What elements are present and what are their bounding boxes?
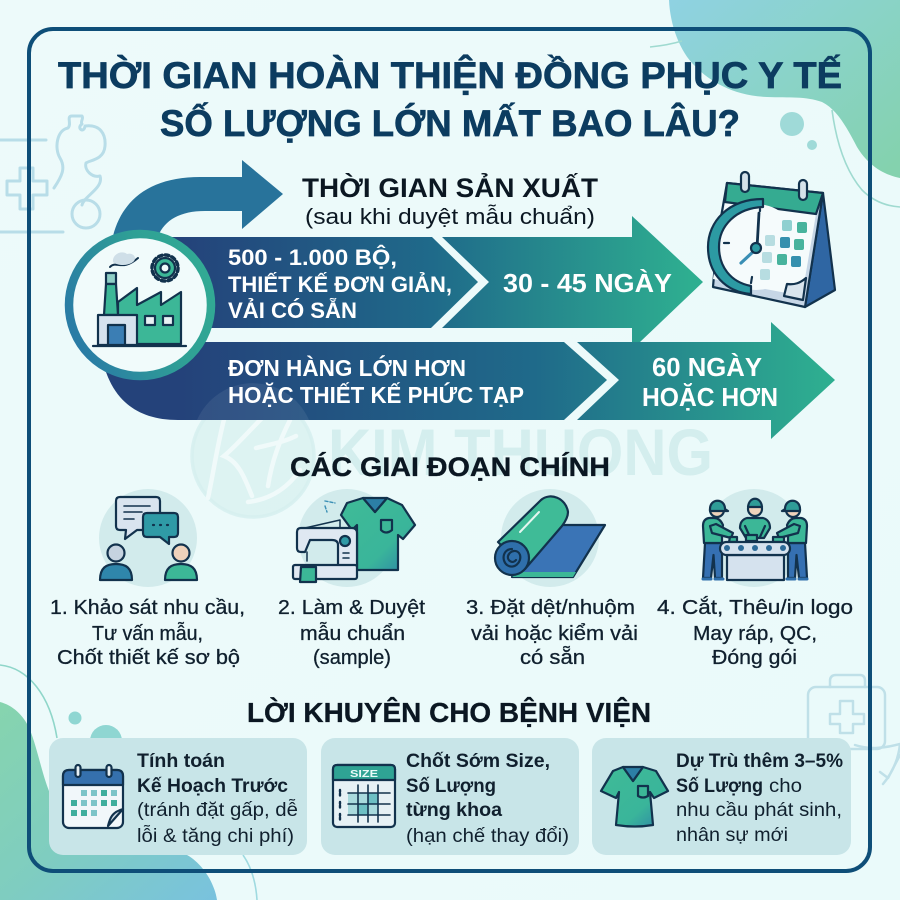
heading: advice for hospitals: LỜI KHUYÊN CHO BỆNH VIỆN <box>247 697 651 728</box>
faint medical bag decoration <box>808 675 900 784</box>
faint watermark over the arrow <box>197 383 309 420</box>
card 1 text: lỗi & tăng chi phí) <box>137 824 294 847</box>
stage 3 text: 3. Đặt dệt/nhuộm <box>466 596 635 619</box>
icon: size chart <box>333 765 395 827</box>
icon: fabric roll <box>495 489 605 587</box>
arrow text: quantity <box>228 245 452 323</box>
icon: workers at conveyor <box>703 489 807 587</box>
arrow text: 30-45 days: 30 - 45 NGÀY <box>503 268 672 298</box>
arrow: 30-45 days track <box>170 216 703 342</box>
card 3 text <box>676 750 843 846</box>
stage 1: survey <box>50 489 245 669</box>
card 1 text <box>137 750 298 847</box>
arrow text: quantity: THIẾT KẾ ĐƠN GIẢN, <box>228 272 452 297</box>
watermark: Kim Thuong logo and name: KIM THUONG <box>328 415 713 489</box>
card 1: plan ahead <box>49 738 307 855</box>
heading: production time <box>302 171 599 229</box>
card 1 text: Kế Hoạch Trước <box>137 775 288 797</box>
card 2 text <box>406 750 569 847</box>
stage 2 text: mẫu chuẩn <box>300 622 405 645</box>
stage 2 text: (sample) <box>313 646 391 669</box>
stage 1 text: 1. Khảo sát nhu cầu, <box>50 596 245 619</box>
stage 3 text: vải hoặc kiểm vải <box>471 622 638 645</box>
card 3 text: Dự Trù thêm 3–5% <box>676 750 843 772</box>
stage 2 text: 2. Làm & Duyệt <box>278 596 425 619</box>
stage 4: cutting and sewing <box>657 489 853 669</box>
arrow text: large orders: HOẶC THIẾT KẾ PHỨC TẠP <box>228 381 524 408</box>
icon: size chart: SIZE <box>350 768 378 780</box>
heading: production time: (sau khi duyệt mẫu chuẩn) <box>305 204 595 229</box>
icon: sewing machine and scrubs <box>293 489 415 587</box>
card 3: reserve extra <box>592 738 851 855</box>
arrow text: large orders: ĐƠN HÀNG LỚN HƠN <box>228 354 466 381</box>
card 1 text: Tính toán <box>137 750 225 772</box>
icon: scrub shirt <box>601 767 668 826</box>
card 2 text: (hạn chế thay đổi) <box>406 825 569 847</box>
card 3 text: nhu cầu phát sinh, <box>676 799 842 821</box>
stage 3 text: có sẵn <box>520 646 585 669</box>
card 2 text: từng khoa <box>406 799 502 821</box>
card 2 text: Số Lượng <box>406 775 496 797</box>
card 3 text: cho <box>769 775 802 797</box>
arrow text: quantity: VẢI CÓ SẴN <box>228 298 357 323</box>
icon: calendar <box>63 765 123 828</box>
heading: production time: THỜI GIAN SẢN XUẤT <box>302 171 599 203</box>
stage 1 text: Tư vấn mẫu, <box>92 622 203 645</box>
icon: calendar with clock <box>708 172 835 307</box>
decorative blob bottom left <box>0 665 257 900</box>
stage 4 text: 4. Cắt, Thêu/in logo <box>657 596 853 619</box>
card 2 text: Chốt Sớm Size, <box>406 750 550 772</box>
arrow text: large orders <box>228 354 524 408</box>
card 3 text: Số Lượng <box>676 775 763 797</box>
arrow text: 60 days <box>642 352 778 412</box>
title <box>58 54 842 144</box>
heading: main stages: CÁC GIAI ĐOẠN CHÍNH <box>290 451 610 482</box>
arrow text: 60 days: 60 NGÀY <box>652 352 762 382</box>
stage 1 text: Chốt thiết kế sơ bộ <box>57 646 240 669</box>
watermark: Kim Thuong logo and name <box>192 395 713 517</box>
icon: factory in ring <box>69 234 211 376</box>
arrow: 60 days track <box>103 322 835 439</box>
stage 4 text: May ráp, QC, <box>693 622 817 645</box>
title: THỜI GIAN HOÀN THIỆN ĐỒNG PHỤC Y TẾ <box>58 54 842 96</box>
stage 1 text <box>50 596 245 669</box>
stage 4 text: Đóng gói <box>712 646 797 669</box>
stage 3: fabric <box>466 489 638 669</box>
icon: conversation <box>99 489 197 587</box>
card 1 text: (tránh đặt gấp, dễ <box>137 798 298 821</box>
arrow text: 60 days: HOẶC HƠN <box>642 382 778 412</box>
card 3 text: nhân sự mới <box>676 824 788 846</box>
card 2: size and quantity <box>321 738 579 855</box>
faint stethoscope and cross decoration <box>0 116 105 232</box>
arrow: curved top arrow <box>113 160 283 236</box>
stage 3 text <box>466 596 638 669</box>
decorative blob top right <box>650 0 900 207</box>
stage 4 text <box>657 596 853 669</box>
title: SỐ LƯỢNG LỚN MẤT BAO LÂU? <box>160 102 740 144</box>
arrow text: quantity: 500 - 1.000 BỘ, <box>228 245 397 270</box>
stage 2 text <box>278 596 425 669</box>
stage 2: sample <box>278 489 425 669</box>
